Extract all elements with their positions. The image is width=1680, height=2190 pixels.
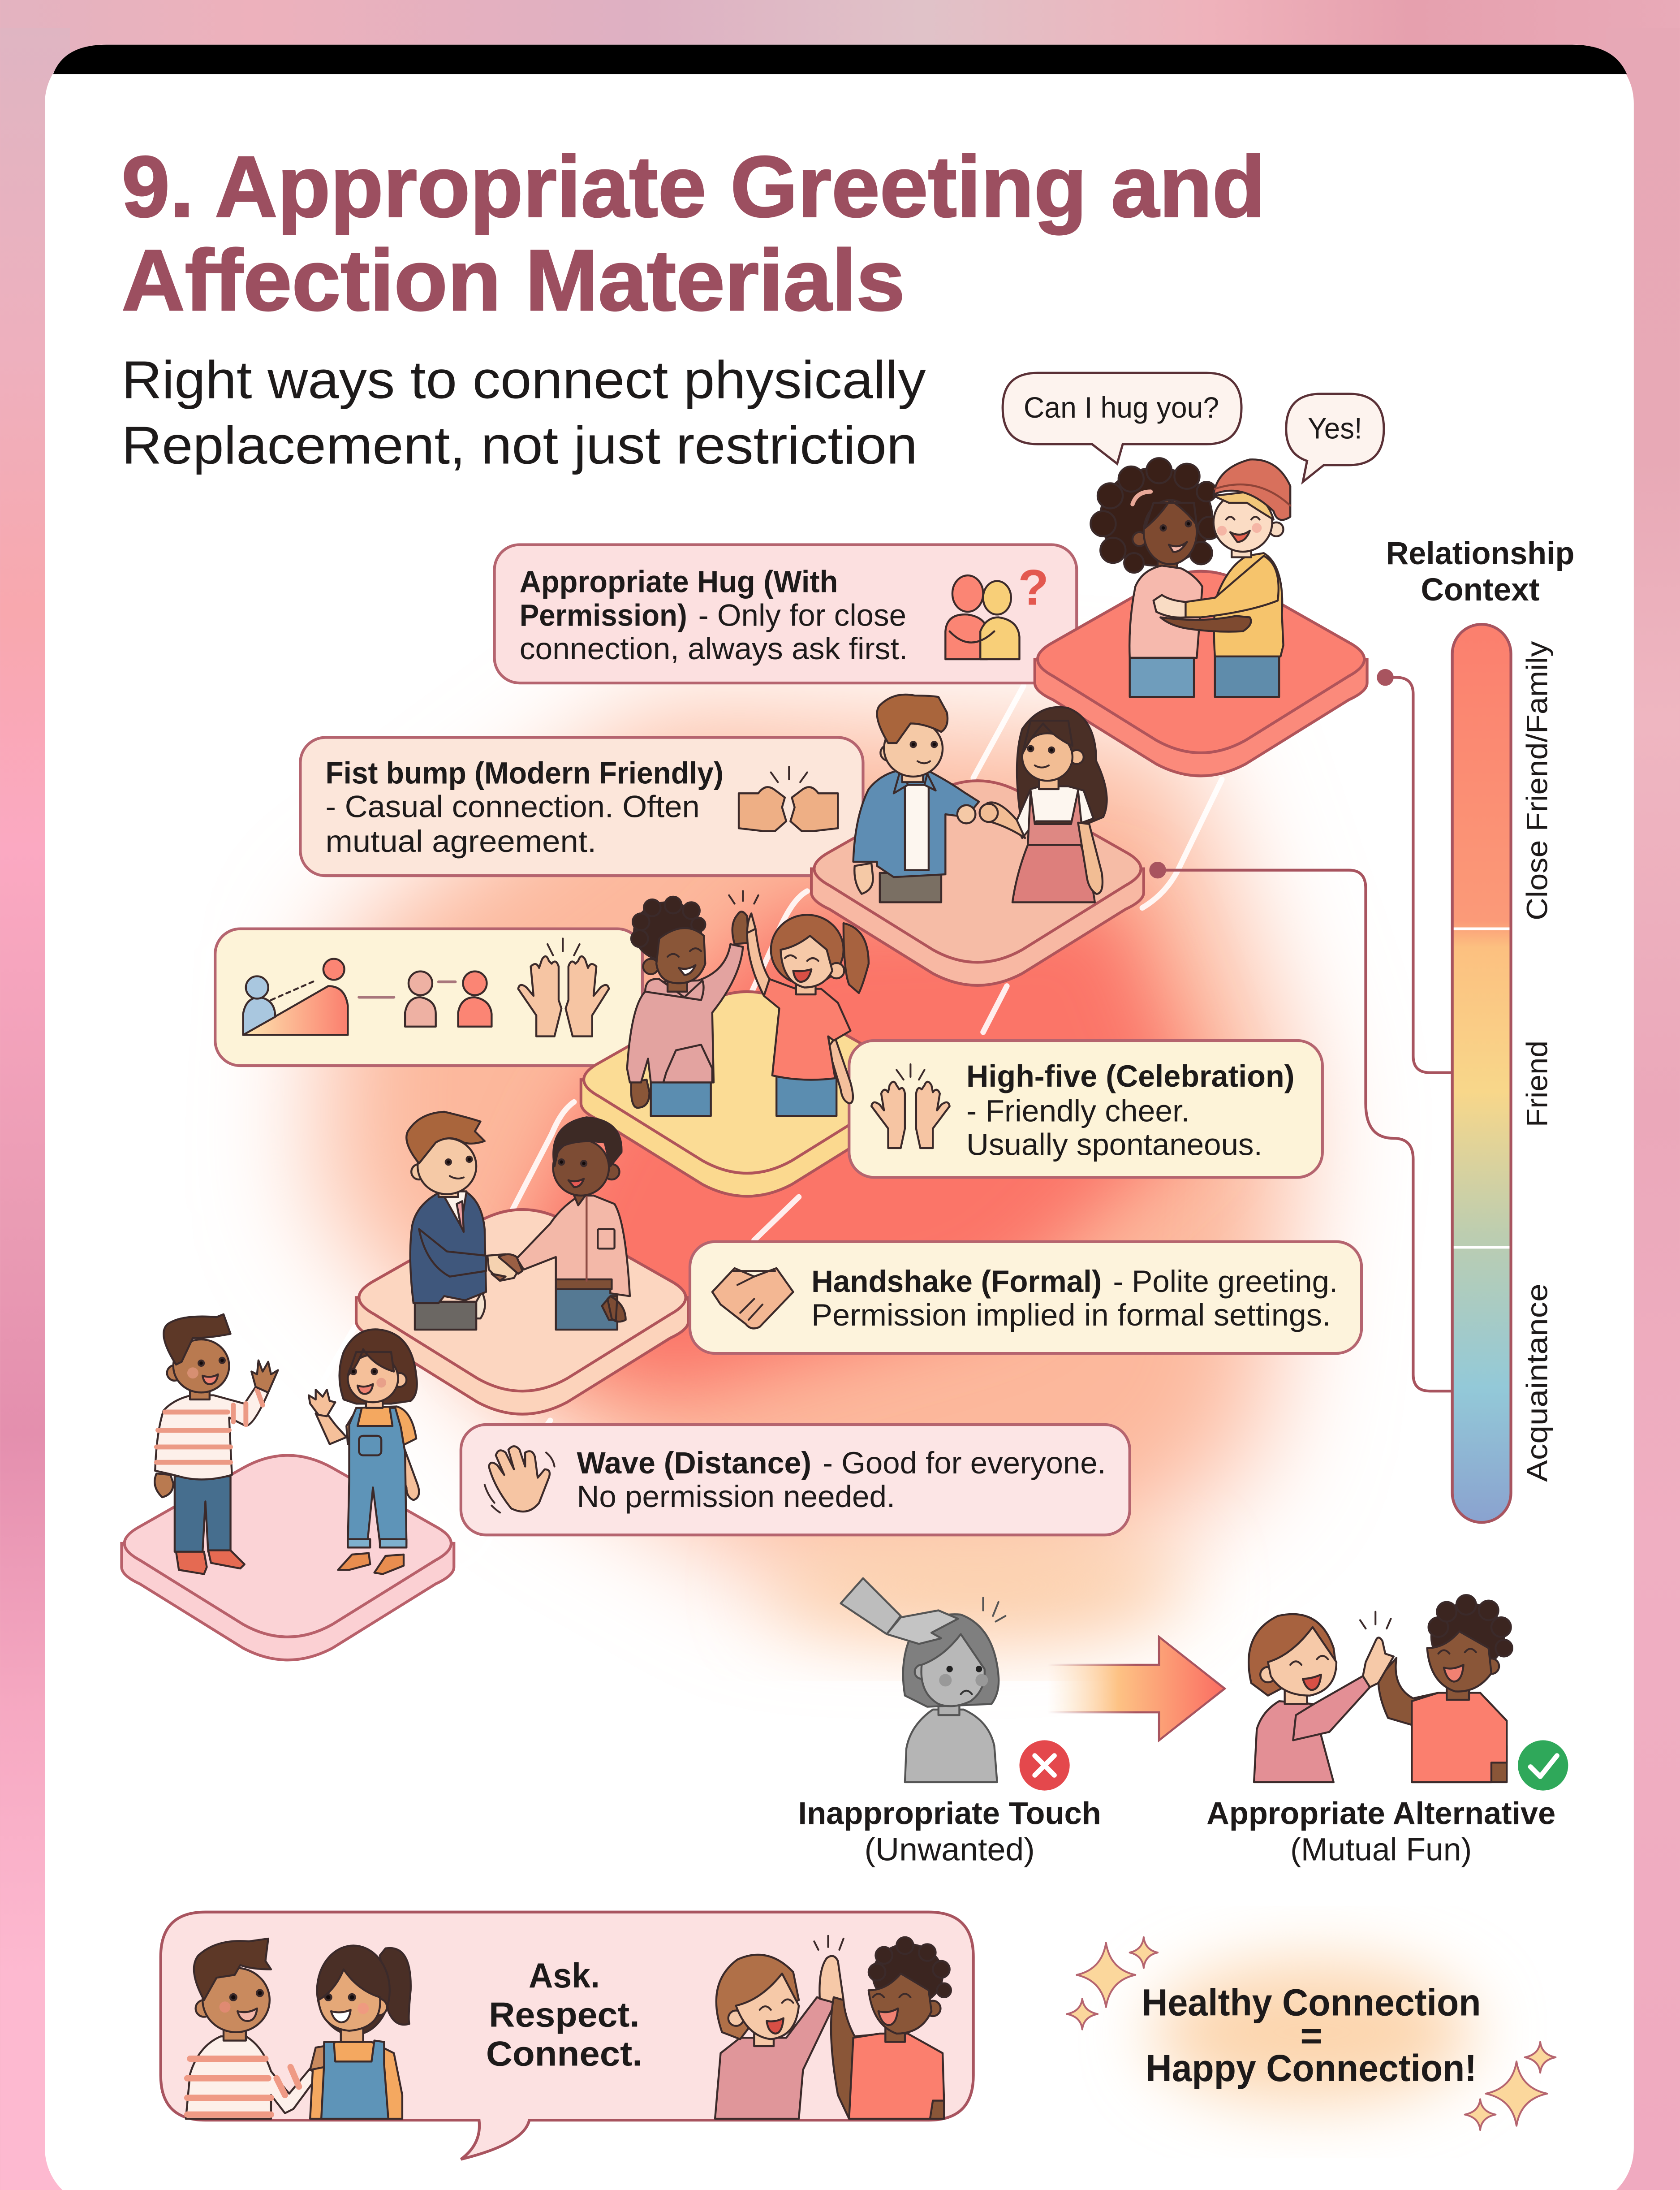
tagline: Healthy Connection [1142, 1981, 1481, 2023]
panel: appropriate hug: - Only for close [698, 598, 906, 632]
relationship context heading: Relationship [1386, 536, 1574, 571]
slogan: Respect. [489, 1995, 640, 2034]
slogan [486, 1956, 642, 2073]
panel: high-five [849, 1041, 1322, 1177]
label: friend: Friend [1521, 1041, 1554, 1127]
panel: handshake: - Polite greeting. [1113, 1264, 1338, 1299]
label: inappropriate touch [798, 1796, 1101, 1867]
platform: high five [581, 992, 913, 1196]
label: appropriate alternative: (Mutual Fun) [1290, 1831, 1472, 1867]
badge: check [1518, 1740, 1568, 1791]
figures: boy and girl [186, 1939, 411, 2119]
label: appropriate alternative [1206, 1796, 1555, 1867]
arrow [1047, 1637, 1225, 1740]
tagline: Happy Connection! [1146, 2047, 1477, 2089]
title [121, 138, 1265, 328]
icon: handshake [712, 1268, 793, 1328]
figures: hugging pair [1090, 458, 1290, 697]
panel: high-five: High-five (Celebration) [966, 1059, 1294, 1093]
panel: fist bump: Fist bump (Modern Friendly) [325, 756, 724, 790]
connector: hug to close friend [1378, 670, 1452, 1073]
glow: healthy connection [1152, 1962, 1473, 2102]
tagline: = [1300, 2015, 1322, 2057]
platform: wave [121, 1456, 454, 1660]
background glow [321, 713, 1299, 1638]
panel: appropriate hug: Appropriate Hug (With [520, 564, 838, 599]
panel: fist bump: - Casual connection. Often [325, 789, 700, 824]
panel: wave: No permission needed. [577, 1479, 895, 1514]
figures: high-five pair [715, 1936, 951, 2119]
label: acquaintance: Acquaintance [1521, 1283, 1554, 1482]
figures: high-five pair [627, 891, 869, 1116]
panel: appropriate hug: Permission) [520, 598, 687, 632]
path lines between steps [282, 686, 1222, 1567]
figures: handshake pair [406, 1112, 630, 1330]
slogan: Ask. [529, 1956, 600, 1995]
subtitle: Right ways to connect physically [121, 350, 926, 410]
figure: inappropriate touch [841, 1578, 1005, 1782]
sparkles [1067, 1937, 1555, 2130]
relationship context heading [1386, 536, 1574, 608]
figures: fist bump pair [853, 695, 1107, 902]
speech panel: ask respect connect [161, 1912, 974, 2159]
speech bubble: yes: Yes! [1308, 412, 1362, 445]
panel: wave [461, 1425, 1130, 1535]
panel: handshake: Handshake (Formal) [811, 1264, 1102, 1299]
icon: waving hand [485, 1446, 555, 1512]
slogan: Connect. [486, 2034, 642, 2073]
speech bubble: yes [1286, 394, 1384, 482]
panel: fist bump: mutual agreement. [325, 824, 596, 859]
subtitle [121, 350, 926, 475]
relationship context heading: Context [1421, 572, 1539, 608]
platform: handshake [356, 1209, 689, 1414]
panel: approach icons [215, 929, 642, 1066]
panel: high-five: Usually spontaneous. [966, 1127, 1262, 1162]
figures: appropriate alternative [1249, 1595, 1512, 1782]
icon: two people [405, 972, 491, 1027]
icon: hug with question mark [945, 559, 1049, 659]
panel: wave: - Good for everyone. [823, 1446, 1106, 1480]
platform: fist bump [811, 781, 1144, 985]
subtitle: Replacement, not just restriction [121, 416, 918, 475]
label: inappropriate touch: (Unwanted) [865, 1831, 1035, 1867]
icon: approach slope [243, 959, 394, 1035]
panel: handshake [690, 1242, 1361, 1353]
label: inappropriate touch: Inappropriate Touch [798, 1796, 1101, 1831]
icon: fist bump [739, 767, 838, 831]
panel: high-five: - Friendly cheer. [966, 1094, 1190, 1128]
figures: waving kids [155, 1314, 419, 1574]
panel: wave: Wave (Distance) [577, 1446, 811, 1480]
connector: fist bump to acquaintance [1150, 863, 1452, 1391]
panel: appropriate hug: connection, always ask first. [520, 631, 908, 666]
relationship bar [1452, 624, 1554, 1522]
panel: fist bump [300, 738, 863, 876]
badge: X [1019, 1740, 1070, 1791]
tagline [1142, 1981, 1481, 2089]
panel: appropriate hug [495, 545, 1077, 683]
speech bubble: can I hug you [1003, 373, 1241, 464]
speech bubble: can I hug you: Can I hug you? [1024, 391, 1219, 424]
panel: handshake: Permission implied in formal settings. [811, 1298, 1331, 1332]
label: close friend/family: Close Friend/Family [1521, 641, 1554, 920]
platform: hug [1035, 571, 1367, 776]
icon: high-five hands [871, 1064, 950, 1148]
title: 9. Appropriate Greeting and [121, 138, 1265, 235]
title: Affection Materials [121, 232, 905, 328]
icon: hug with question mark: ? [1018, 559, 1049, 616]
icon: raised hands [518, 938, 609, 1037]
label: appropriate alternative: Appropriate Alternative [1206, 1796, 1555, 1831]
